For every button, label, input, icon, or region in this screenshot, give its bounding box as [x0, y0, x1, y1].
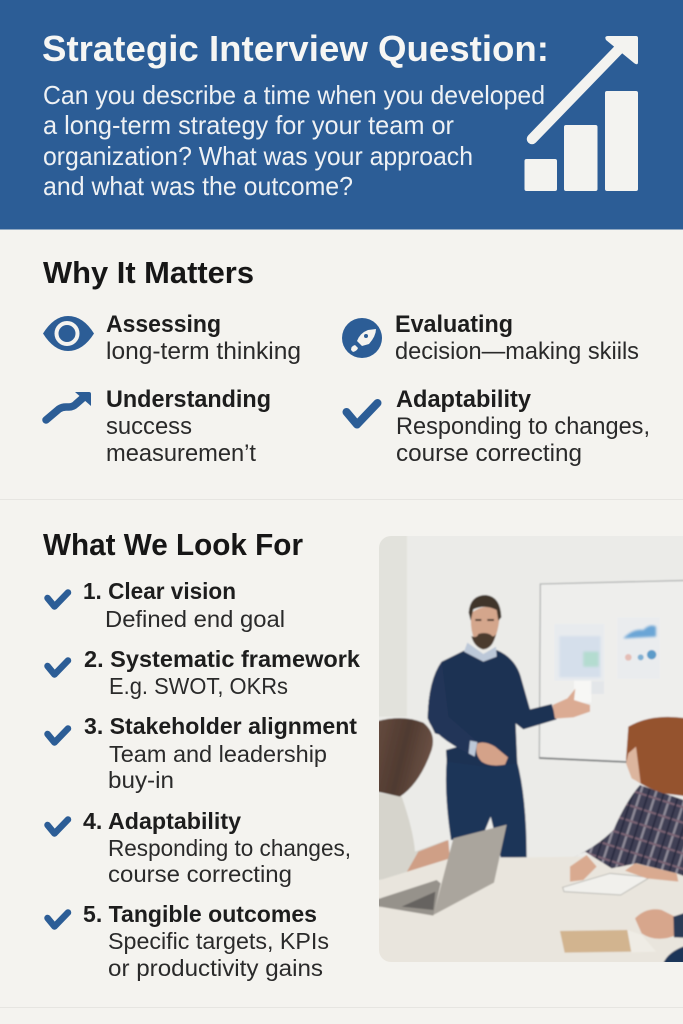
item: adaptability: course correcting [396, 440, 582, 467]
face and neck [470, 606, 500, 638]
list item 1: clear vision: 1. Clear vision [83, 578, 236, 604]
heading: why it matters: Why It Matters [43, 255, 254, 290]
collar [464, 643, 497, 662]
icon: check [48, 912, 68, 926]
hair [469, 595, 501, 621]
panel: header [0, 0, 683, 230]
clasped hand [476, 743, 508, 766]
list item 3: stakeholder alignment: Team and leadership [109, 741, 327, 767]
list item 5: tangible outcomes [48, 901, 329, 981]
list item 3: stakeholder alignment: 3. Stakeholder alignment [84, 713, 357, 739]
list item 5: tangible outcomes: Specific targets, KPIs [108, 928, 329, 954]
icon: eye [43, 316, 94, 351]
list item 4: adaptability: 4. Adaptability [83, 808, 241, 834]
whiteboard [539, 580, 683, 762]
list item 5: tangible outcomes: 5. Tangible outcomes [83, 901, 317, 927]
question text: a long-term strategy for your team or [43, 110, 454, 140]
list item 2: systematic framework: 2. Systematic framework [84, 646, 360, 672]
lower right hand and sleeve [635, 907, 683, 963]
question text: organization? What was your approach [43, 141, 473, 171]
item: understanding: measuremen’t [106, 440, 256, 467]
heading: what we look for: What We Look For [43, 527, 303, 562]
pointing hand [553, 689, 590, 719]
title: Strategic Interview Question: [42, 28, 549, 69]
list item 2: systematic framework: E.g. SWOT, OKRs [109, 673, 288, 699]
list item 5: tangible outcomes: or productivity gains [108, 955, 323, 981]
panel: why it matters [43, 255, 650, 467]
list item 1: clear vision [48, 578, 285, 632]
item: adaptability [396, 386, 650, 467]
panel: what we look for [43, 527, 360, 981]
icon: check mark [346, 403, 378, 424]
right person [570, 717, 683, 883]
item: evaluating: Evaluating [395, 311, 513, 338]
list item 2: systematic framework [48, 646, 360, 699]
item: adaptability: Adaptability [396, 386, 531, 413]
poster right [617, 617, 660, 679]
item: understanding: success [106, 413, 192, 440]
table [370, 855, 683, 963]
folder [560, 929, 632, 954]
icon: check [48, 820, 68, 834]
sleeve [428, 696, 470, 748]
eyes [474, 618, 495, 622]
list item 4: adaptability: course correcting [108, 861, 292, 887]
list item 3: stakeholder alignment: buy-in [108, 767, 174, 793]
woman left [379, 717, 450, 880]
icon: check [48, 592, 68, 606]
sweater [428, 650, 557, 767]
icon: check [48, 728, 68, 742]
photo: presenter in meeting room [370, 530, 683, 963]
icon: rocket [342, 318, 382, 358]
item: evaluating: decision—making skiils [395, 338, 639, 365]
notebook [563, 873, 650, 895]
list item 3: stakeholder alignment [48, 713, 357, 793]
list item 1: clear vision: Defined end goal [105, 606, 285, 632]
item: assessing [106, 311, 301, 365]
trousers [446, 760, 527, 857]
beard [471, 633, 496, 649]
question text: Can you describe a time when you developed [43, 80, 545, 110]
presenter [428, 595, 590, 857]
list item 4: adaptability [48, 808, 351, 887]
item: assessing: Assessing [106, 311, 221, 338]
item: adaptability: Responding to changes, [396, 413, 650, 440]
item: understanding: Understanding [106, 386, 271, 413]
wall [379, 536, 683, 856]
icon: rising bar chart with arrow [524, 36, 638, 191]
header background [0, 0, 683, 230]
icon: check [48, 660, 68, 674]
question text: and what was the outcome? [43, 171, 353, 201]
list item 4: adaptability: Responding to changes, [108, 835, 351, 861]
question text [43, 80, 545, 201]
poster left [554, 624, 604, 681]
item: assessing: long-term thinking [106, 338, 301, 365]
icon: trend arrow [46, 392, 91, 420]
laptop [370, 825, 507, 916]
item: understanding [106, 386, 271, 467]
item: evaluating [395, 311, 639, 365]
